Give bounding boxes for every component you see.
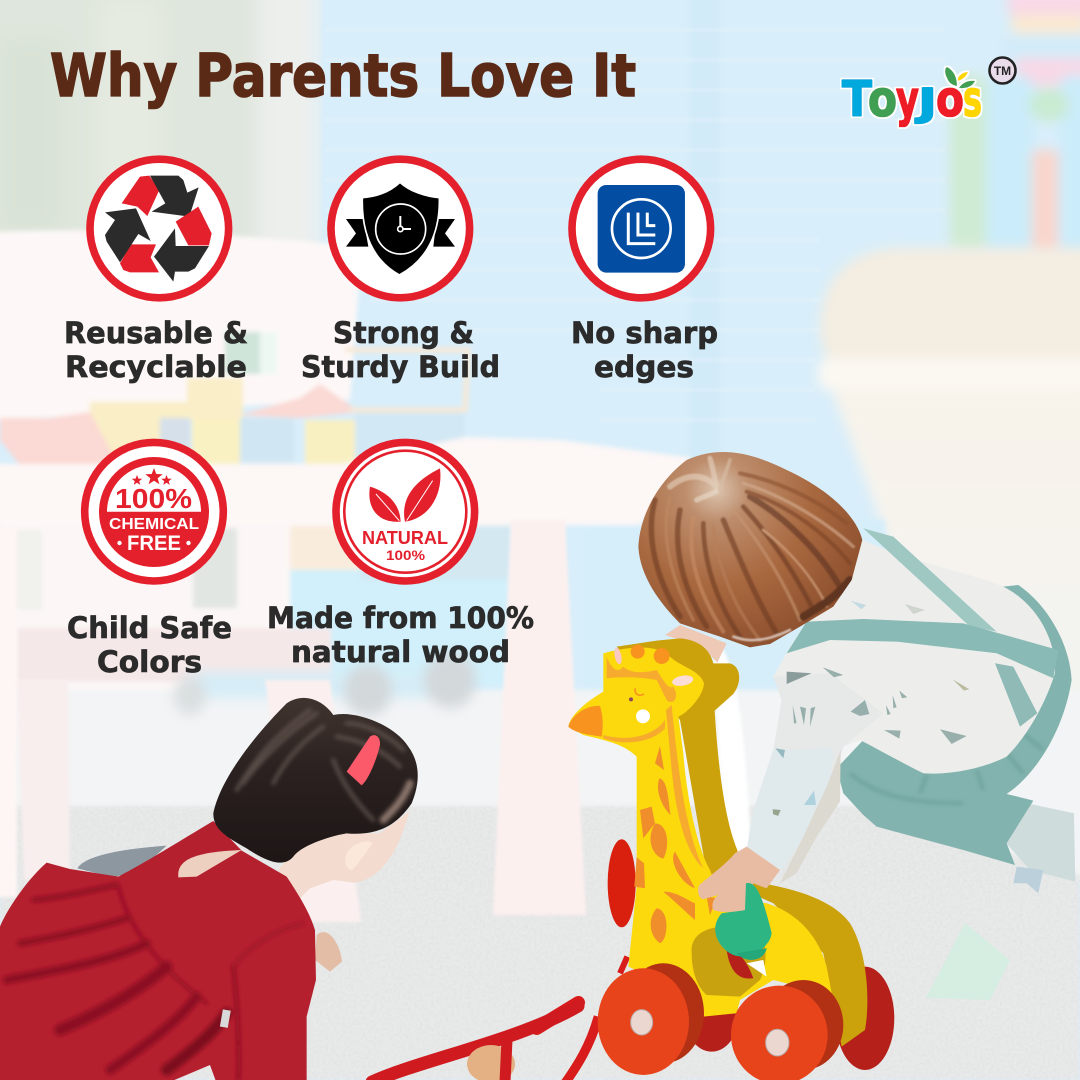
- rear wheels: [836, 967, 894, 1070]
- table and chair legs in front of the carpet: [0, 520, 752, 922]
- horizontal window slats: [325, 30, 945, 420]
- body cutout: [692, 927, 766, 997]
- label: strong and sturdy build: Strong &: [333, 316, 474, 350]
- far floor: [585, 520, 885, 710]
- toy stool blur: [950, 0, 1080, 255]
- label: child safe colors: Child Safe: [67, 611, 232, 645]
- icon: chemical free badge: 100%: [115, 483, 192, 514]
- photo: giraffe pull toy: [537, 638, 894, 1080]
- rope loop: [608, 839, 636, 927]
- label: strong and sturdy build: Sturdy Build: [301, 350, 500, 384]
- body side: [617, 638, 867, 1047]
- body front: [568, 647, 835, 1017]
- stretcher and rear legs: [16, 628, 331, 682]
- carpet-side rope and wooden bead: [372, 1006, 578, 1080]
- logo: Toyjos: o: [868, 71, 897, 128]
- markings: [568, 657, 717, 943]
- basket: [820, 248, 1080, 365]
- icon: no sharp edges badge: [572, 159, 711, 298]
- table top: [0, 437, 692, 527]
- icon: natural 100% badge: [336, 442, 475, 581]
- icon: natural 100% badge: 100%: [386, 548, 425, 563]
- photo: girl in red dress: [0, 698, 418, 1080]
- logo: Toyjos: T: [842, 71, 873, 128]
- front right wheel: [763, 980, 843, 1070]
- logo: Toyjos: y: [896, 71, 919, 128]
- label: reusable and recyclable: Reusable &: [64, 316, 248, 350]
- logo: Toyjos: s: [963, 71, 982, 128]
- icon: recycle badge: [90, 159, 229, 298]
- label: child safe colors: Colors: [97, 645, 202, 679]
- icon: chemical free badge: CHEMICAL: [109, 516, 199, 533]
- trademark badge: [990, 58, 1016, 84]
- title: Why Parents Love It: [50, 41, 636, 110]
- toy block on the carpet: [926, 923, 1010, 1000]
- label: no sharp edges: [571, 316, 718, 384]
- label: reusable and recyclable: Recyclable: [65, 350, 247, 384]
- label: made from natural wood: [267, 601, 534, 669]
- front left wheel: [623, 963, 704, 1063]
- logo: Toyjos: o: [936, 71, 964, 128]
- toys on table: [225, 332, 277, 374]
- icon: shield clock badge: [331, 159, 470, 298]
- photo: boy's hand on the toy: [698, 813, 803, 934]
- label: made from natural wood: Made from 100%: [267, 601, 534, 635]
- label: made from natural wood: natural wood: [291, 635, 510, 669]
- face sliver: [665, 625, 727, 663]
- icon: chemical free badge: [85, 442, 223, 581]
- chair back: [0, 230, 362, 420]
- under table: [0, 520, 300, 690]
- logo: Toyjos: J: [914, 81, 937, 125]
- label: child safe colors: [67, 611, 232, 679]
- carpet: [0, 806, 1080, 1080]
- label: no sharp edges: edges: [594, 350, 694, 384]
- photo: boy in teal overalls: [638, 452, 1075, 893]
- shirt print: [773, 601, 969, 826]
- label: no sharp edges: No sharp: [571, 316, 718, 350]
- icon: natural 100% badge: NATURAL: [362, 528, 448, 548]
- knob: [715, 883, 772, 957]
- logo: Toyjos: [842, 67, 982, 128]
- icon: chemical free badge: FREE: [127, 532, 181, 555]
- trademark badge: TM: [994, 64, 1011, 78]
- label: strong and sturdy build: [301, 316, 500, 384]
- label: reusable and recyclable: [64, 316, 248, 384]
